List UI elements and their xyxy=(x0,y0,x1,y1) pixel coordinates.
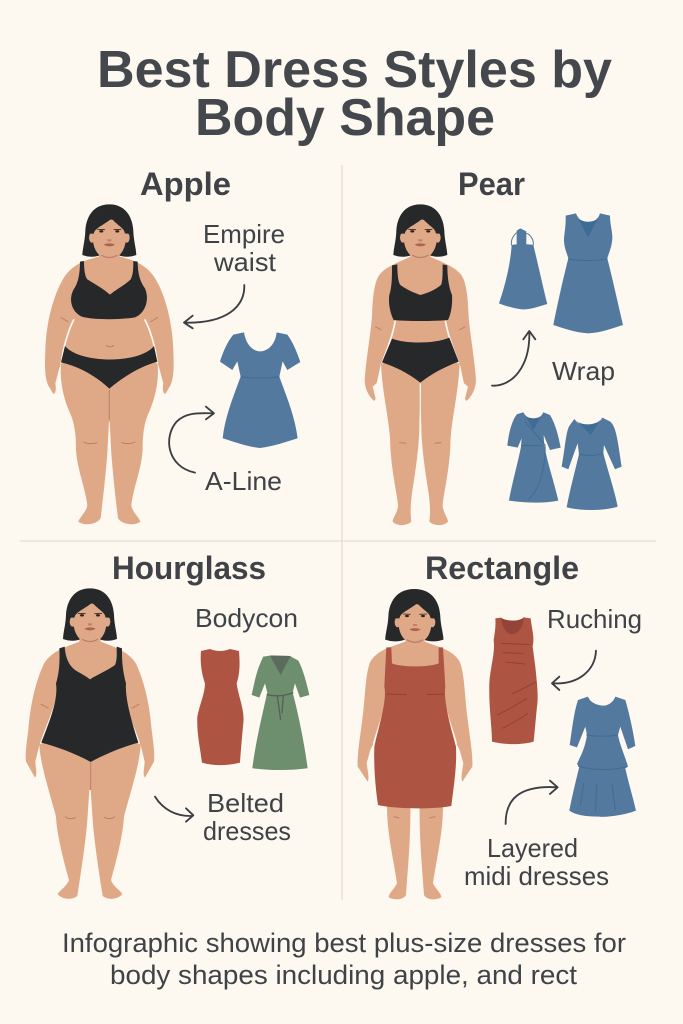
caption: body shapes including apple, and rect xyxy=(110,960,578,990)
dress: a-line xyxy=(220,332,300,448)
panel: pear xyxy=(365,166,623,525)
heading: hourglass: Hourglass xyxy=(112,550,266,586)
dividers xyxy=(20,165,656,900)
dress: wrap xyxy=(507,412,561,503)
panel: hourglass xyxy=(26,550,309,899)
title xyxy=(97,41,612,147)
label: layered midi dresses: Layered xyxy=(487,833,578,863)
label: layered midi dresses: midi dresses xyxy=(464,861,609,891)
label: layered midi dresses xyxy=(464,833,609,891)
label: empire waist: waist xyxy=(213,247,277,277)
arrow: belted dresses xyxy=(155,797,193,822)
label: bodycon: Bodycon xyxy=(195,603,298,633)
label: ruching: Ruching xyxy=(547,604,642,634)
heading: rectangle: Rectangle xyxy=(425,550,579,586)
label: a-line: A-Line xyxy=(205,466,282,496)
panel: apple xyxy=(45,166,300,524)
title: Body Shape xyxy=(195,89,495,147)
label: empire waist: Empire xyxy=(203,219,285,249)
panel: rectangle xyxy=(358,550,642,899)
arrow: pear xyxy=(492,331,535,386)
hourglass figure xyxy=(26,588,154,899)
heading: pear: Pear xyxy=(458,166,525,202)
dress: red bodycon xyxy=(197,649,244,765)
caption: Infographic showing best plus-size dresses for xyxy=(62,928,626,958)
arrow: layered midi xyxy=(506,781,558,824)
label: belted dresses xyxy=(203,788,291,846)
label: empire waist xyxy=(203,219,285,277)
label: belted dresses: Belted xyxy=(207,788,284,818)
label: belted dresses: dresses xyxy=(203,816,291,846)
dress: long sleeve v-neck xyxy=(562,418,622,510)
heading: apple: Apple xyxy=(140,166,231,202)
rectangle figure xyxy=(358,589,472,899)
arrow: a-line xyxy=(169,407,214,473)
dress: green belted xyxy=(252,655,309,770)
dress: red ruched xyxy=(489,617,538,744)
caption xyxy=(62,928,626,990)
apple figure xyxy=(45,204,174,524)
dress: v-neck sleeveless xyxy=(553,213,623,333)
arrow: empire waist xyxy=(184,285,244,328)
dress: blue layered xyxy=(569,697,636,817)
dress: halter xyxy=(499,228,547,309)
arrow: ruching xyxy=(552,651,596,690)
label: wrap: Wrap xyxy=(552,356,615,386)
title: Best Dress Styles by xyxy=(97,41,612,99)
pear figure xyxy=(365,204,476,525)
